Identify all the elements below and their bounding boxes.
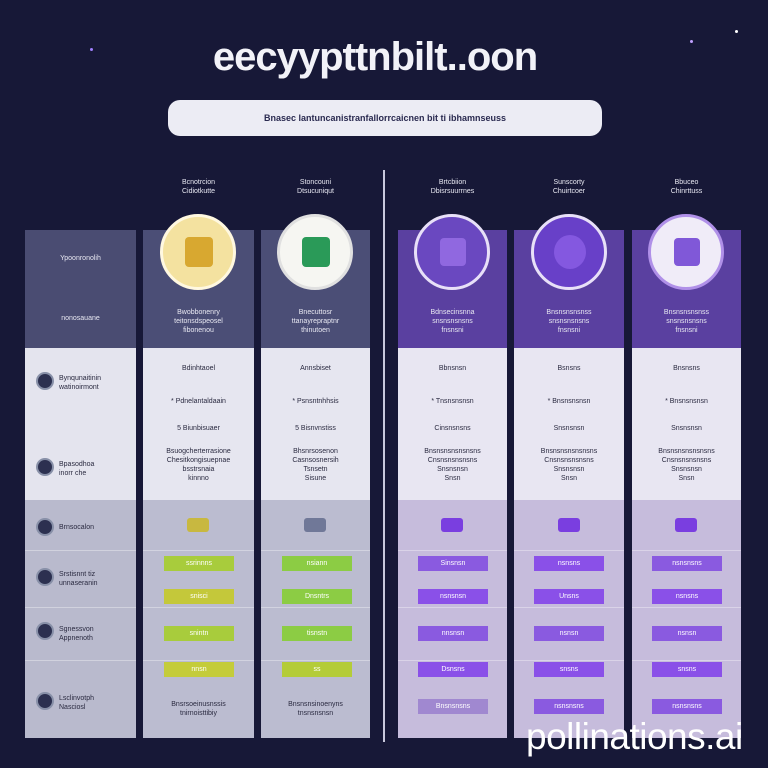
panel: column 2: Sisune: [305, 475, 326, 482]
panel: column 1: snisci: [190, 593, 208, 600]
text: Stoncouni: [300, 179, 331, 186]
panel: column 3: [398, 230, 507, 738]
panel: column 4: Snsnsnsn: [554, 466, 584, 473]
watermark: pollinations.ai: [526, 716, 743, 757]
icon: purple coin 3: [648, 214, 724, 290]
text: Sunscorty: [553, 179, 585, 186]
panel: column 3: Sinsnsn: [441, 560, 465, 567]
panel: column 1: Chesitkongisuepnae: [167, 457, 230, 464]
panel: column 1: teitonsdspeosel: [174, 318, 223, 325]
panel: column 5: Bnsnsnsnsnss: [664, 309, 709, 316]
text: Chinrttuss: [671, 188, 702, 195]
panel: column 2: Bnecuttosr: [299, 309, 332, 316]
panel: column 4: snsnsnsnsns: [549, 318, 589, 325]
panel: column 3: Bnsnsnsns: [436, 703, 470, 710]
panel: label column: watinoirmont: [59, 384, 99, 391]
panel: column 2: Annsbiset: [300, 365, 331, 372]
panel: column 2: Bnsnsnsinoenyns: [288, 701, 343, 708]
panel: label column: inorr che: [59, 470, 86, 477]
panel: column 1: [143, 230, 254, 738]
panel: label column: Bpasodhoa: [59, 461, 94, 468]
panel: label column: Ypoonronolih: [60, 255, 101, 262]
panel: column 5: * Bnsnsnsnsn: [665, 398, 708, 405]
panel: column 2: tisnstn: [307, 630, 327, 637]
panel: column 4: Unsns: [559, 593, 579, 600]
text: Brtcbiion: [439, 179, 466, 186]
panel: column 3: fnsnsni: [441, 327, 464, 334]
panel: label column: Appnenoth: [59, 635, 93, 642]
panel: column 5: Bnsnsns: [673, 365, 700, 372]
panel: column 5: [632, 230, 741, 738]
panel: column 3: nsnsnsn: [440, 593, 466, 600]
panel: column 4: * Bnsnsnsnsn: [548, 398, 590, 405]
stars: [90, 48, 93, 51]
panel: column 5: snsnsnsnsns: [666, 318, 707, 325]
panel: column 2: Dnsntrs: [305, 593, 329, 600]
panel: column 1: snintn: [190, 630, 208, 637]
panel: column 3: Cnsnsnsnsnsns: [428, 457, 477, 464]
panel: label column: Brnsocalon: [59, 524, 94, 531]
panel: column 4: Bnsnsnsnsnsnsns: [541, 448, 597, 455]
panel: column 4: Snsn: [561, 475, 577, 482]
panel: label column: unnaseranin: [59, 580, 98, 587]
panel: column 2: nsiann: [307, 560, 327, 567]
panel: column 2: Casnsosnersih: [292, 457, 339, 464]
panel: label column: Srstisnnt tiz: [59, 571, 95, 578]
divider: [383, 170, 385, 742]
panel: column 4: nsnsns: [558, 560, 580, 567]
panel: column 3: Cinsnsnsns: [434, 425, 471, 432]
text: Bbuceo: [675, 179, 698, 186]
panel: label column: Sgnessvon: [59, 626, 94, 633]
panel: column 2: ss: [314, 666, 320, 673]
panel: column 1: Bdinhtaoel: [182, 365, 215, 372]
column headings: [182, 178, 215, 195]
panel: column 5: nsnsnsns: [672, 560, 702, 567]
panel: column 1: nnsn: [191, 666, 207, 673]
panel: column 3: * Tnsnsnsnsn: [431, 398, 474, 405]
icon: green coin: [277, 214, 353, 290]
panel: column 1: 5 Biunbisuaer: [177, 425, 220, 432]
panel: column 1: Bnsrsoeinusnssis: [171, 701, 226, 708]
icon: purple coin 2: [531, 214, 607, 290]
panel: column 2: tnsnsnsnsn: [298, 710, 333, 717]
panel: column 3: snsnsnsnsns: [432, 318, 473, 325]
panel: column 2: 5 Bisnvnstiss: [295, 425, 336, 432]
panel: column 2: [261, 230, 370, 738]
panel: column 1: ssrinnns: [186, 560, 212, 567]
panel: column 3: Bdnsecinsnna: [430, 309, 474, 316]
panel: column 1: fibonenou: [183, 327, 214, 334]
text: Dbisrsuurrnes: [431, 188, 474, 195]
panel: column 3: Dsnsns: [441, 666, 465, 673]
panel: column 4: Bnsnsnsnsnss: [546, 309, 592, 316]
panel: column 2: thinutoen: [301, 327, 330, 334]
panel: column 2: Tsnsetn: [303, 466, 328, 473]
title: eecyypttnbilt..oon: [213, 35, 537, 79]
icon: purple coin 1: [414, 214, 490, 290]
panel: column 3: Snsnsnsn: [437, 466, 468, 473]
panel: column 1: * Pdnelantaldaain: [171, 398, 226, 405]
panel: column 5: Snsnsnsn: [671, 466, 702, 473]
panel: column 4: snsns: [560, 666, 578, 673]
panel: column 4: Bsnsns: [558, 365, 580, 372]
panel: column 4: fnsnsni: [558, 327, 580, 334]
panel: column 5: nsnsnsns: [672, 703, 702, 710]
panel: label column: nonosauane: [61, 315, 100, 322]
panel: column 4: nsnsn: [560, 630, 578, 637]
panel: column 1: Bwobbonenry: [177, 309, 220, 316]
panel: column 5: snsns: [678, 666, 696, 673]
panel: column 3: Bnsnsnsnsnsnsns: [424, 448, 481, 455]
panel: label column: [25, 230, 136, 738]
panel: column 4: nsnsnsns: [554, 703, 584, 710]
panel: column 5: Snsn: [679, 475, 694, 482]
panel: column 2: * Psnsntnhhsis: [292, 398, 339, 405]
panel: column 4: [514, 230, 624, 738]
subtitle pill: Bnasec lantuncanistranfallorrcaicnen bit ti ibhamnseuss: [264, 113, 506, 123]
panel: column 5: fnsnsni: [675, 327, 698, 334]
panel: column 3: Snsn: [445, 475, 460, 482]
panel: column 5: Bnsnsnsnsnsnsns: [658, 448, 715, 455]
panel: column 1: Bsuogcherterrasione: [166, 448, 231, 455]
panel: column 3: nnsnsn: [442, 630, 464, 637]
panel: column 1: bsstrsnaia: [183, 466, 214, 473]
panel: column 4: Cnsnsnsnsnsns: [544, 457, 594, 464]
panel: column 2: Bhsnrsosenon: [293, 448, 338, 455]
panel: column 5: Cnsnsnsnsnsns: [662, 457, 711, 464]
panel: column 1: tnirnoisttibiy: [180, 710, 217, 717]
panel: label column: Lsclinvotph: [59, 695, 94, 702]
panel: column 5: nsnsns: [676, 593, 698, 600]
panel: column 5: Snsnsnsn: [671, 425, 702, 432]
icon: gold coin: [160, 214, 236, 290]
panel: column 5: nsnsn: [678, 630, 696, 637]
column headings: Cidiotkutte: [182, 188, 215, 195]
panel: label column: Nasciosl: [59, 704, 85, 711]
panel: column 1: kinnno: [188, 475, 209, 482]
panel: label column: Bynqunaitinin: [59, 375, 101, 382]
text: Dtsucuniqut: [297, 188, 334, 195]
subtitle pill: [168, 100, 602, 136]
panel: column 4: Snsnsnsn: [554, 425, 584, 432]
panel: column 3: Bbnsnsn: [439, 365, 466, 372]
panel: column 2: ttanayrepraptnr: [292, 318, 339, 325]
column headings: Bcnotrcion: [182, 179, 215, 186]
text: Chuirtcoer: [553, 188, 585, 195]
